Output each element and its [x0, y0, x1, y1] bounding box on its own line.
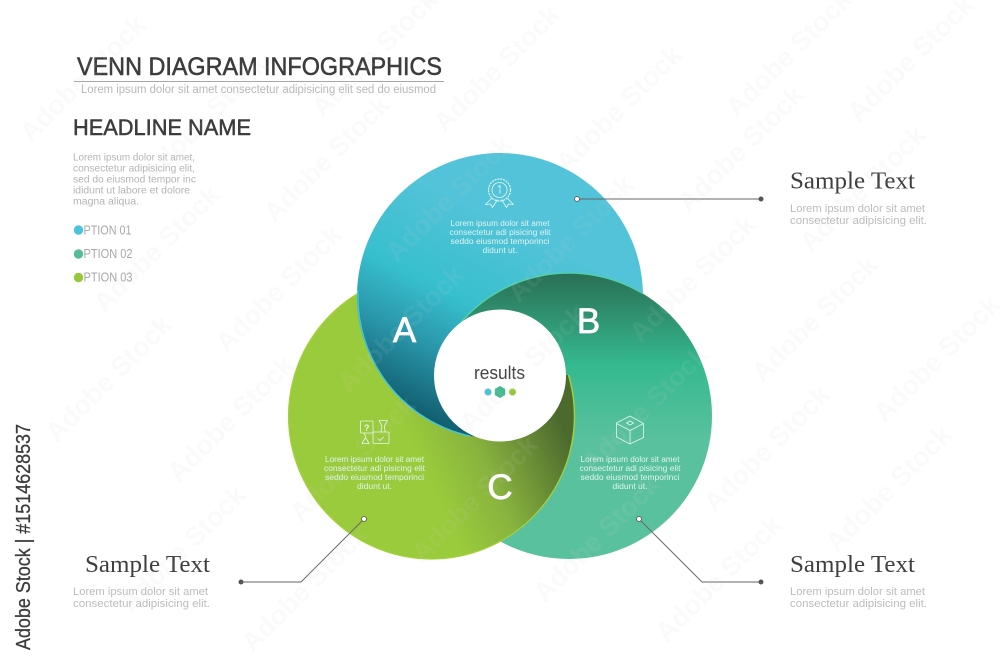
left text block: ididunt ut labore et dolore — [73, 186, 190, 196]
text: circle A description: Lorem ipsum dolor sit amet — [450, 218, 550, 228]
heading: headline name: HEADLINE NAME — [73, 115, 251, 140]
text: circle C description — [324, 454, 426, 491]
text: circle A description: consectetur adi pisicing elit — [450, 227, 551, 237]
text: circle C description: didunt ut. — [357, 481, 392, 491]
watermark pattern: Adobe Stock — [14, 9, 152, 148]
watermark pattern: Adobe Stock — [528, 469, 666, 608]
region C overlap — [524, 375, 576, 452]
text: circle A description: seddo eiusmod temporinci — [450, 236, 550, 246]
legend item: option 02: PTION 02 — [84, 247, 133, 261]
watermark pattern: Adobe Stock — [576, 339, 714, 478]
venn diagram — [288, 153, 712, 559]
callout: bottom left: consectetur adipisicing elit. — [73, 598, 210, 610]
watermark pattern: Adobe Stock — [794, 119, 932, 258]
title underline — [74, 81, 444, 82]
circle C base — [288, 273, 574, 559]
callout: bottom left — [73, 552, 210, 610]
callout: bottom left: Sample Text — [85, 552, 210, 578]
text: circle C description: seddo eiusmod temporinci — [325, 472, 424, 482]
callout: top right — [790, 168, 927, 227]
legend — [74, 224, 133, 284]
left text block: consectetur adipisicing elit, — [73, 164, 195, 174]
watermark pattern: Adobe Stock — [698, 379, 836, 518]
legend item: option 03: PTION 03 — [84, 270, 133, 284]
icon: decision puzzle: ? — [364, 423, 369, 433]
watermark pattern: Adobe Stock — [746, 249, 884, 388]
letter B: B — [577, 302, 600, 341]
text: circle C description: consectetur adi pisicing elit — [324, 463, 426, 473]
left text block — [73, 152, 196, 208]
watermark pattern: Adobe Stock — [428, 0, 566, 138]
watermark pattern: Adobe Stock — [550, 39, 688, 178]
leader line: bottom right — [636, 516, 764, 584]
label: results: results — [474, 362, 525, 383]
text: circle B description — [580, 454, 681, 491]
callout: bottom left: Lorem ipsum dolor sit amet — [73, 586, 208, 598]
left text block: magna aliqua. — [73, 196, 139, 208]
text: circle C description: Lorem ipsum dolor sit amet — [325, 454, 425, 464]
text: circle A description: didunt ut. — [482, 245, 518, 255]
letter A: A — [393, 311, 417, 350]
left text block: Lorem ipsum dolor sit amet, — [73, 152, 195, 164]
text: circle B description: didunt ut. — [612, 481, 648, 491]
icon: medal — [486, 179, 514, 208]
callout: bottom right: Lorem ipsum dolor sit amet — [790, 586, 925, 598]
text: circle B description: Lorem ipsum dolor sit amet — [580, 454, 680, 464]
callout: top right: consectetur adipisicing elit. — [790, 215, 927, 227]
center white circle — [434, 310, 566, 442]
watermark pattern: Adobe Stock — [820, 419, 958, 558]
watermark pattern: Adobe Stock — [380, 129, 518, 268]
title: VENN DIAGRAM INFOGRAPHICS — [77, 53, 442, 81]
callout: bottom right — [790, 552, 927, 610]
subtitle: Lorem ipsum dolor sit amet consectetur adipisicing elit sed do eiusmod — [81, 84, 436, 96]
watermark pattern: Adobe Stock — [284, 389, 422, 528]
region B overlap — [460, 272, 644, 418]
legend item: option 01: PTION 01 — [84, 224, 132, 238]
circle A — [357, 153, 643, 439]
results dots — [484, 386, 516, 398]
watermark pattern: Adobe Stock — [502, 169, 640, 308]
callout: bottom right: Sample Text — [790, 552, 915, 578]
callout: bottom right: consectetur adipisicing elit. — [790, 598, 927, 610]
watermark pattern: Adobe Stock — [136, 49, 274, 188]
watermark pattern: Adobe Stock — [332, 259, 470, 398]
callout: top right: Sample Text — [790, 168, 915, 194]
leader line: bottom left — [238, 516, 366, 584]
watermark pattern: Adobe Stock — [258, 89, 396, 228]
watermark pattern: Adobe Stock — [114, 479, 252, 618]
letter C: C — [487, 468, 513, 507]
icon: box — [616, 416, 644, 444]
watermark pattern: Adobe Stock — [40, 309, 178, 448]
watermark pattern: Adobe Stock — [236, 519, 374, 658]
circle A rim — [358, 290, 470, 436]
circle B base — [426, 273, 712, 559]
watermark pattern: Adobe Stock — [210, 219, 348, 358]
text: circle B description: seddo eiusmod temporinci — [580, 472, 680, 482]
watermark pattern: Adobe Stock — [624, 209, 762, 348]
watermark pattern: Adobe Stock — [454, 299, 592, 438]
left text block: sed do eiusmod tempor inc — [73, 174, 196, 186]
watermark pattern: Adobe Stock — [88, 179, 226, 318]
watermark pattern: Adobe Stock — [162, 349, 300, 488]
icon: decision puzzle — [360, 420, 389, 444]
watermark pattern: Adobe Stock — [650, 509, 788, 648]
watermark pattern: Adobe Stock — [672, 79, 810, 218]
stock id vertical text: Adobe Stock | #1514628537 — [13, 424, 35, 650]
leader line: top right — [574, 196, 764, 202]
text: circle B description: consectetur adi pisicing elit — [580, 463, 681, 473]
text: circle A description — [450, 218, 551, 255]
watermark pattern: Adobe Stock — [406, 429, 544, 568]
callout: top right: Lorem ipsum dolor sit amet — [790, 203, 925, 215]
